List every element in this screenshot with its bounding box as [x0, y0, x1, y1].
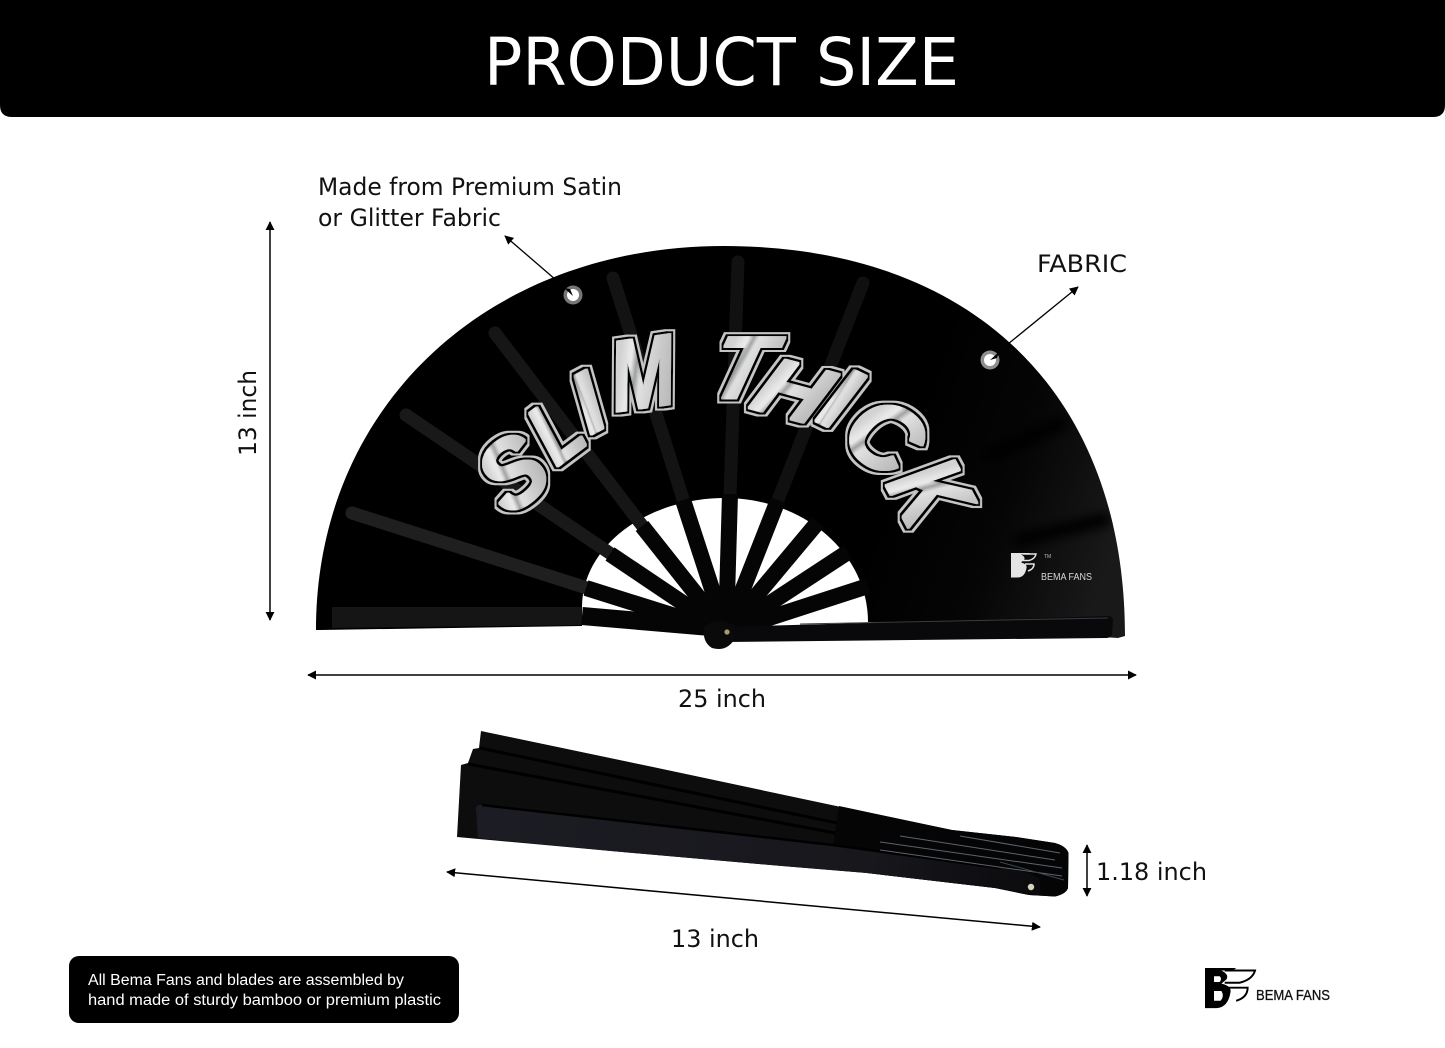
callout: fabric [1008, 250, 1127, 344]
fan lettering SLIM THICK: I [553, 353, 624, 452]
fan lettering SLIM THICK: T [700, 318, 791, 418]
brand logo: BEMA FANS [1256, 988, 1330, 1004]
fan lettering SLIM THICK: K [865, 439, 998, 548]
fan logo: BEMA FANS [1041, 572, 1092, 583]
ribs through fabric [352, 262, 863, 589]
fan fabric [316, 246, 1125, 638]
width dimension: 25 inch [678, 685, 766, 713]
fan lettering SLIM THICK [455, 312, 998, 548]
closed length dimension [447, 872, 1040, 953]
fan logo [1011, 553, 1092, 583]
closed fan [457, 731, 1068, 896]
title: PRODUCT SIZE [484, 24, 959, 101]
fan lettering SLIM THICK: S [455, 411, 570, 534]
assembly note: All Bema Fans and blades are assembled by [88, 972, 404, 989]
front guard panel [476, 805, 1040, 895]
guard panel edge [482, 805, 1000, 868]
fan lettering SLIM THICK: L [509, 379, 602, 482]
callout: premium satin fabric [318, 173, 622, 280]
right rail [722, 616, 1113, 642]
fan lettering SLIM THICK: M [603, 312, 684, 433]
closed thickness dimension: 1.18 inch [1096, 858, 1207, 886]
bottom rib in fabric [332, 607, 582, 628]
hub [704, 621, 736, 649]
assembly note [69, 956, 459, 1023]
open fan [316, 246, 1125, 649]
rib highlights [880, 836, 1064, 880]
callout: fabric: FABRIC [1037, 250, 1127, 278]
fan logo: TM [1044, 554, 1051, 560]
assembly note: hand made of sturdy bamboo or premium plastic [88, 992, 441, 1009]
fan lettering SLIM THICK: H [739, 341, 848, 443]
eyelet right [980, 350, 1000, 370]
eyelet left [564, 286, 582, 304]
closed length dimension: 13 inch [671, 925, 759, 953]
rivet [1028, 884, 1034, 890]
rib zone [833, 806, 1068, 896]
title banner [0, 0, 1445, 117]
closed fan body [457, 731, 1068, 896]
hub rivet [724, 629, 730, 635]
rail highlight [800, 618, 1108, 624]
ribs across opening [582, 494, 868, 632]
closed thickness dimension [1087, 845, 1207, 896]
height dimension: 13 inch [234, 370, 262, 456]
fold bands [468, 748, 837, 833]
fan lettering SLIM THICK: I [805, 346, 876, 450]
brand logo [1205, 968, 1330, 1008]
callout: premium satin fabric: or Glitter Fabric [318, 204, 501, 232]
fold shadows on fabric [1024, 512, 1113, 542]
callout: premium satin fabric: Made from Premium Satin [318, 173, 622, 201]
fan lettering SLIM THICK: C [824, 373, 946, 501]
